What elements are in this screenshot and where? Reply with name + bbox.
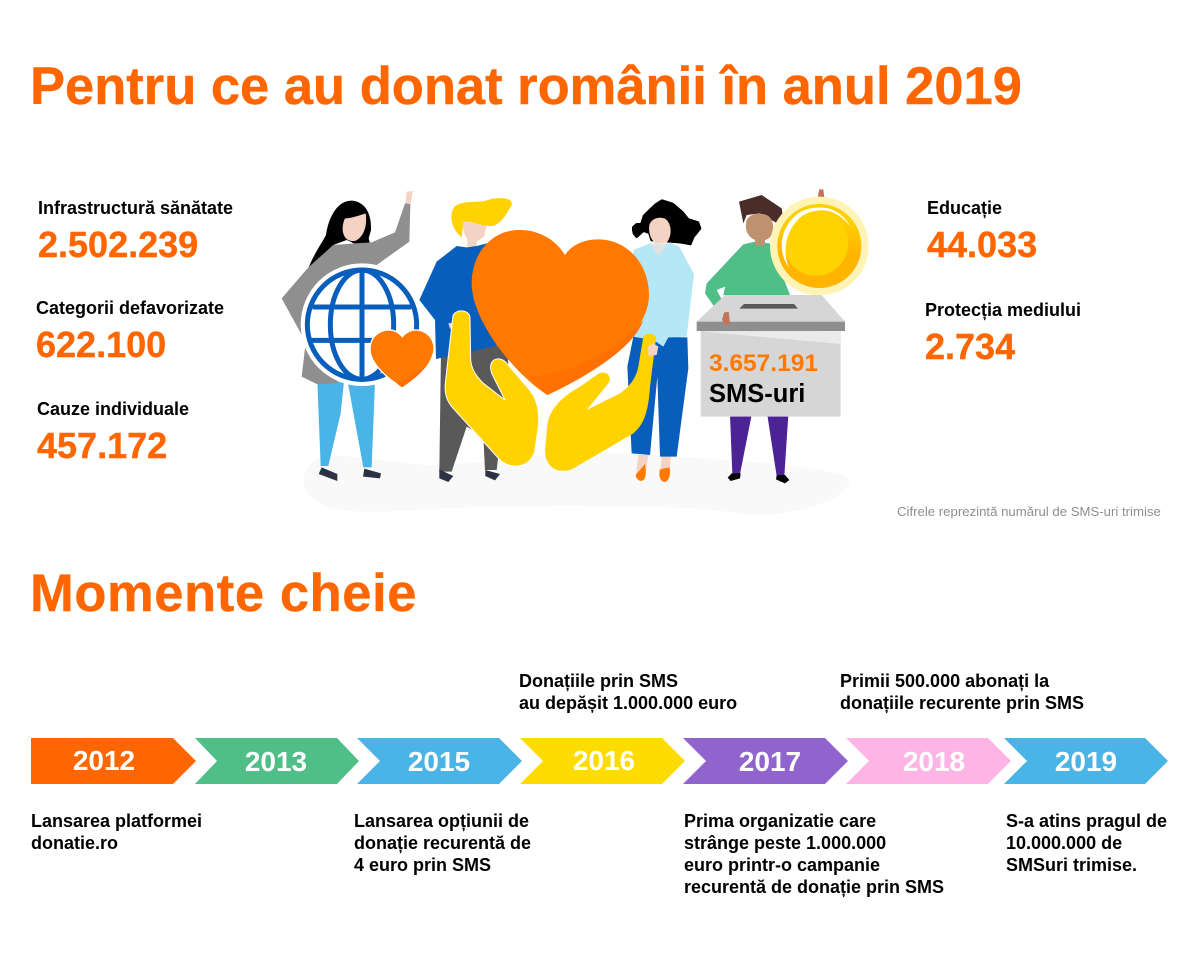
arrow 2017 (683, 738, 848, 784)
milestone 2012: donatie.ro (31, 833, 118, 853)
stat: Protecția mediului (925, 300, 1081, 367)
milestone 2017: euro printr-o campanie (684, 855, 880, 875)
arrow years: 2019 (1055, 746, 1117, 777)
ballot box (697, 295, 845, 417)
stat: Cauze individuale: 457.172 (37, 425, 167, 466)
arrow years: 2012 (73, 745, 135, 776)
milestone 2019: SMSuri trimise. (1006, 855, 1137, 875)
stat: Infrastructură sănătate: Infrastructură sănătate (38, 198, 233, 218)
title: Pentru ce au donat românii în anul 2019 (30, 57, 1022, 116)
small heart (370, 330, 434, 387)
milestone 2019 (1006, 811, 1167, 875)
finger (818, 189, 824, 197)
stat: Educație: 44.033 (927, 224, 1037, 265)
torso and head (705, 242, 790, 320)
person 4 with box and coin (697, 189, 869, 483)
milestone 2016: Donațiile prin SMS (519, 671, 678, 691)
arrow 2018 (846, 738, 1011, 784)
milestone 2017: Prima organizatie care (684, 811, 876, 831)
person 2 (419, 198, 512, 482)
arrow 2013 (195, 738, 359, 784)
arrow years: 2017 (739, 746, 801, 777)
stat: Categorii defavorizate (36, 298, 224, 365)
legs (730, 415, 788, 476)
arrow years: 2013 (245, 746, 307, 777)
milestone 2015: donație recurentă de (354, 833, 531, 853)
stat: Infrastructură sănătate (38, 198, 233, 265)
milestone 2018: donațiile recurente prin SMS (840, 693, 1084, 713)
milestone 2015 (354, 811, 531, 875)
arrow 2012 (31, 738, 196, 784)
coin (770, 197, 869, 295)
arrow years: 2016 (573, 745, 635, 776)
stat: Protecția mediului: 2.734 (925, 326, 1015, 367)
stat: Categorii defavorizate: 622.100 (36, 324, 166, 365)
timeline arrows (31, 738, 1168, 784)
milestone 2018 (840, 671, 1084, 714)
milestone 2017: strânge peste 1.000.000 (684, 833, 886, 853)
milestone 2016 (519, 671, 737, 713)
person 1 with globe (282, 191, 434, 481)
milestone 2015: 4 euro prin SMS (354, 855, 491, 875)
arrow years: 2015 (408, 746, 470, 777)
arrow 2016 (520, 738, 685, 784)
footnote: Cifrele reprezintă numărul de SMS-uri trimise (897, 504, 1161, 519)
milestone 2016: au depășit 1.000.000 euro (519, 693, 737, 713)
stat: Categorii defavorizate: Categorii defavorizate (36, 298, 224, 318)
arrow 2019 (1004, 738, 1168, 784)
person 3 (627, 201, 700, 482)
arrow years (73, 745, 1117, 777)
stat: Cauze individuale (37, 399, 189, 466)
milestone 2012: Lansarea platformei (31, 811, 202, 831)
stat: Educație (927, 198, 1037, 265)
left hand (445, 311, 539, 466)
milestone 2015: Lansarea opțiunii de (354, 811, 529, 831)
arrow years: 2018 (903, 746, 965, 777)
milestone 2012 (31, 811, 202, 853)
arrow 2015 (357, 738, 522, 784)
box text: 3.657.191: 3.657.191 (709, 350, 818, 377)
milestone 2018: Primii 500.000 abonați la (840, 671, 1049, 691)
heading: Momente cheie: Momente cheie (30, 564, 417, 623)
stat: Cauze individuale: Cauze individuale (37, 399, 189, 419)
ground shadow (303, 453, 849, 515)
right hand (545, 334, 658, 471)
milestone 2017 (684, 811, 944, 898)
stat: Educație: Educație (927, 198, 1002, 218)
stat: Infrastructură sănătate: 2.502.239 (38, 224, 198, 265)
milestone 2019: 10.000.000 de (1006, 833, 1122, 853)
large heart (472, 230, 649, 395)
stat: Protecția mediului: Protecția mediului (925, 300, 1081, 320)
milestone 2017: recurentă de donație prin SMS (684, 877, 944, 897)
milestone 2019: S-a atins pragul de (1006, 811, 1167, 831)
globe (301, 263, 423, 386)
box text: SMS-uri: SMS-uri (709, 380, 805, 408)
